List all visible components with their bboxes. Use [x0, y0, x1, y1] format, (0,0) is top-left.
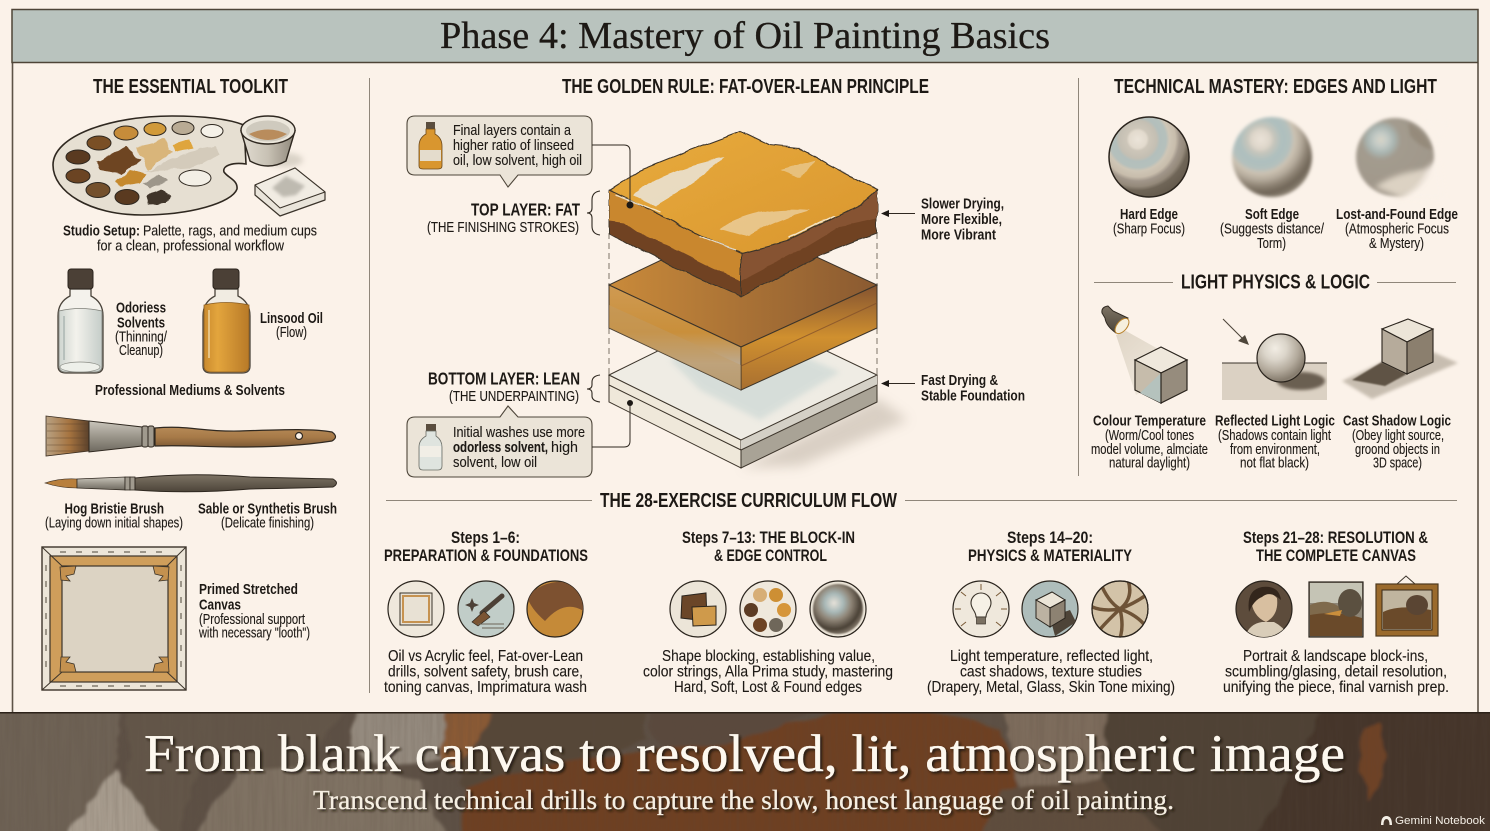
stage: steps 7-13: Hard, Soft, Lost & Found edges: [674, 679, 862, 696]
arrow: to fat layer: [881, 210, 915, 217]
label: cast shadow logic: 3D space): [1373, 456, 1422, 472]
caption: studio setup: [63, 222, 317, 254]
label: top layer fat: TOP LAYER: FAT: [471, 200, 580, 220]
caption: studio setup: Palette, rags, and medium cups: [143, 224, 317, 240]
label: cast shadow logic: Cast Shadow Logic: [1343, 412, 1451, 430]
banner: closing statement on painted background: [0, 712, 1490, 831]
label: primed canvas: Primed Stretched: [199, 581, 298, 598]
label: primed canvas: Canvas: [199, 596, 241, 614]
label: lean properties: Stable Foundation: [921, 388, 1025, 404]
label: colour temperature: [1091, 412, 1208, 472]
panel: curriculum flow: [384, 489, 1457, 696]
label: soft edge: [1220, 206, 1325, 252]
label: cast shadow logic: groond objects in: [1355, 442, 1440, 458]
label: cast shadow logic: [1343, 412, 1451, 472]
label: reflected light logic: from environment,: [1230, 442, 1320, 458]
stage: steps 1-6: drills, solvent safety, brush care,: [388, 664, 583, 680]
callout: top layer note: oil, low solvent, high oil: [453, 153, 582, 169]
stage: steps 14-20: [927, 528, 1175, 696]
arrow: to lean layer: [881, 380, 915, 387]
label: reflected light logic: Reflected Light Logic: [1215, 412, 1335, 430]
stage: steps 7-13: Shape blocking, establishing value,: [662, 648, 875, 665]
caption: studio setup: Studio Setup:: [63, 222, 140, 240]
icon: solvent bottle: [58, 269, 103, 373]
heading: curriculum: THE 28-EXERCISE CURRICULUM FLOW: [600, 489, 897, 512]
connector: top callout to fat layer: [592, 145, 634, 208]
stage: steps 21-28: THE COMPLETE CANVAS: [1256, 546, 1416, 565]
icon: shape blocks: [670, 581, 726, 637]
label: odorless solvents: Cleanup): [119, 343, 163, 359]
connector: bottom callout to lean layer: [592, 400, 633, 447]
icon: hog bristle brush: [46, 416, 336, 456]
title banner: [12, 10, 1478, 62]
label: primed canvas: (Professional support: [199, 612, 305, 628]
label: odorless solvents: Odoriess: [116, 300, 166, 316]
icon: cast shadow cube: [1342, 319, 1458, 399]
label: odorless solvents: Solvents: [117, 314, 165, 332]
callout: top layer note: Final layers contain a: [453, 123, 572, 139]
stage: steps 7-13: [643, 528, 893, 696]
watermark: gemini notebook: Gemini Notebook: [1395, 815, 1486, 827]
icon: palette with paint wells: [53, 116, 246, 215]
label: sable brush: Sable or Synthetis Brush: [198, 500, 337, 518]
icon: reflected light sphere: [1222, 319, 1327, 400]
painted background: [0, 712, 1490, 831]
icon: edge sphere: [810, 581, 866, 637]
label: lean properties: [921, 372, 1025, 404]
label: bottom layer lean: [428, 368, 580, 405]
panel: technical mastery: [1091, 75, 1458, 472]
subheadline: Transcend technical drills to capture the slow, honest language of oil painting.: [313, 785, 1174, 815]
icon: framed painting: [1376, 576, 1438, 636]
icon: soft edge sphere: [1232, 117, 1312, 197]
stage: steps 1-6: [384, 528, 588, 696]
stage: steps 14-20: (Drapery, Metal, Glass, Skin Tone mixing): [927, 679, 1175, 696]
label: lost and found edge: Lost-and-Found Edge: [1336, 206, 1458, 223]
icon: folded rag: [255, 168, 325, 216]
stage: steps 14-20: cast shadows, texture studies: [960, 664, 1142, 680]
top slab: fat: [609, 131, 877, 297]
label: sable brush: (Delicate finishing): [221, 516, 314, 532]
label: top layer fat: (THE FINISHING STROKES): [427, 220, 579, 236]
label: bottom layer lean: BOTTOM LAYER: LEAN: [428, 368, 580, 388]
icon: hard edge sphere: [1109, 117, 1189, 197]
title banner: Phase 4: Mastery of Oil Painting Basics: [440, 15, 1050, 57]
stage: steps 21-28: Steps 21–28: RESOLUTION &: [1243, 528, 1428, 547]
callout: bottom layer note: odorless solvent,: [453, 440, 548, 456]
label: hard edge: (Sharp Focus): [1113, 222, 1185, 238]
label: top layer fat: [427, 200, 580, 236]
caption: professional mediums: Professional Mediums & Solvents: [95, 382, 285, 399]
caption: studio setup: for a clean, professional workflow: [97, 238, 284, 254]
label: odorless solvents: (Thinning/: [115, 330, 168, 346]
bracket: bottom layer: [587, 375, 600, 402]
label: reflected light logic: [1215, 412, 1335, 472]
icon: toned canvas: [527, 581, 585, 637]
stage: steps 21-28: [1223, 528, 1449, 696]
headline: From blank canvas to resolved, lit, atmospheric image: [144, 725, 1345, 783]
label: primed canvas: [198, 581, 310, 642]
label: fat properties: Slower Drying,: [921, 196, 1004, 212]
stage: steps 14-20: Steps 14–20:: [1007, 528, 1093, 547]
label: colour temperature: natural daylight): [1109, 456, 1190, 472]
stage: steps 7-13: & EDGE CONTROL: [714, 546, 827, 565]
callout: top layer note: higher ratio of linseed: [453, 138, 574, 154]
bracket: top layer: [587, 191, 600, 235]
callout: bottom layer note: solvent, low oil: [453, 455, 537, 471]
icon: cube on grey: [1022, 581, 1078, 637]
label: colour temperature: model volume, almciate: [1091, 442, 1208, 458]
bottom slab: lean: [609, 310, 908, 468]
heading: golden rule: THE GOLDEN RULE: FAT-OVER-LEAN PRINCIPLE: [562, 75, 929, 98]
callout: bottom layer note: Initial washes use more: [453, 425, 585, 441]
label: odorless solvents: [115, 300, 168, 359]
stage: steps 7-13: Steps 7–13: THE BLOCK-IN: [682, 528, 855, 547]
label: reflected light logic: not flat black): [1240, 456, 1309, 472]
label: fat properties: More Flexible,: [921, 211, 1002, 228]
stage: steps 1-6: Steps 1–6:: [451, 528, 520, 547]
stage: steps 14-20: Light temperature, reflected light,: [950, 648, 1153, 665]
label: lost and found edge: [1336, 206, 1458, 252]
label: linseed oil: (Flow): [276, 325, 307, 341]
label: lost and found edge: & Mystery): [1369, 236, 1424, 252]
label: lean properties: Fast Drying &: [921, 372, 998, 389]
label: sable brush: [198, 500, 337, 532]
icon: stretched canvas: [42, 547, 186, 690]
label: cast shadow logic: (Obey light source,: [1352, 428, 1444, 444]
label: hard edge: Hard Edge: [1120, 206, 1178, 223]
label: soft edge: Soft Edge: [1245, 206, 1299, 223]
callout: bottom layer note: [407, 406, 592, 477]
icon: linseed oil bottle: [203, 269, 250, 373]
middle slab: [609, 222, 877, 390]
label: bottom layer lean: (THE UNDERPAINTING): [449, 389, 579, 405]
subheading: light physics: LIGHT PHYSICS & LOGIC: [1181, 270, 1370, 294]
stage: steps 21-28: Portrait & landscape block-ins,: [1243, 648, 1428, 665]
callout: top layer note: [407, 116, 592, 187]
label: fat properties: [921, 196, 1004, 244]
icon: light bulb: [953, 581, 1009, 637]
label: colour temperature: (Worm/Cool tones: [1105, 428, 1194, 444]
icon: portrait: [1236, 581, 1292, 640]
heading: toolkit: THE ESSENTIAL TOOLKIT: [93, 75, 288, 98]
icon: clean brush: [458, 581, 514, 637]
label: hog bristle brush: Hog Bristie Brush: [64, 500, 164, 518]
label: reflected light logic: (Shadows contain light: [1218, 428, 1331, 444]
icon: solvent bottle small: [419, 424, 442, 470]
stage: steps 21-28: unifying the piece, final varnish prep.: [1223, 679, 1449, 696]
label: hog bristle brush: (Laying down initial shapes): [45, 516, 183, 532]
label: hard edge: [1113, 206, 1185, 238]
label: lost and found edge: (Atmospheric Focus: [1345, 222, 1449, 238]
icon: linseed bottle: [419, 122, 442, 169]
label: linseed oil: Linsood Oil: [260, 310, 323, 327]
diagram: layered paint slabs: [609, 131, 908, 468]
icon: lost and found sphere: [1356, 116, 1450, 200]
label: fat properties: More Vibrant: [921, 226, 996, 244]
stage: steps 1-6: toning canvas, Imprimatura wash: [384, 679, 587, 696]
icon: lamp and lit cube: [1102, 306, 1187, 403]
label: soft edge: Torm): [1257, 236, 1286, 252]
icon: medium cup: [241, 116, 303, 167]
label: primed canvas: with necessary "looth"): [198, 626, 310, 642]
stage: steps 1-6: Oil vs Acrylic feel, Fat-over-Lean: [388, 648, 583, 665]
icon: landscape study: [1309, 582, 1363, 637]
icon: canvas frame: [388, 581, 444, 637]
stage: steps 7-13: color strings, Alla Prima study, mastering: [643, 664, 893, 680]
stage: steps 21-28: scumbling/glasing, detail resolution,: [1225, 664, 1447, 680]
label: hog bristle brush: [45, 500, 183, 532]
callout: bottom layer note: high: [551, 440, 578, 456]
label: soft edge: (Suggests distance/: [1220, 222, 1325, 238]
panel: the essential toolkit: [42, 75, 337, 690]
panel: the golden rule fat-over-lean: [407, 75, 1025, 477]
icon: colour string palette: [740, 581, 796, 637]
label: colour temperature: Colour Temperature: [1093, 412, 1206, 430]
icon: sable brush: [45, 475, 336, 492]
stage: steps 14-20: PHYSICS & MATERIALITY: [968, 546, 1133, 565]
stage: steps 1-6: PREPARATION & FOUNDATIONS: [384, 546, 588, 565]
icon: drapery swirl: [1090, 580, 1150, 638]
label: linseed oil: [260, 310, 323, 341]
